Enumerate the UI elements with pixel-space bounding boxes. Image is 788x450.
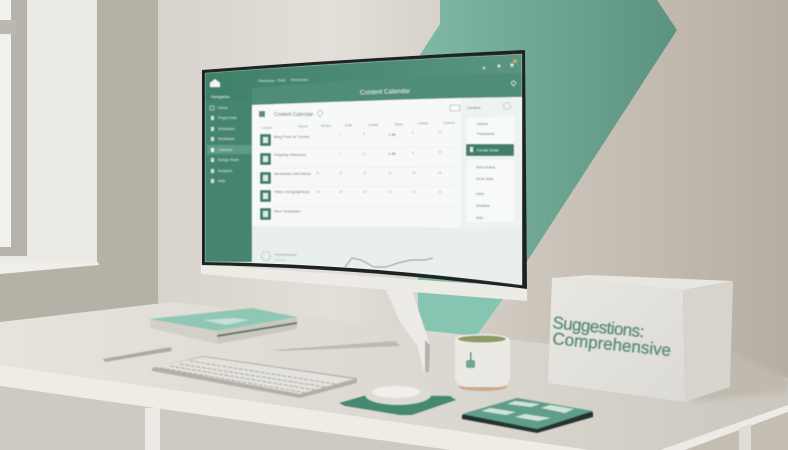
calendar numbers: 16 — [438, 171, 442, 175]
calendar numbers: 9 — [412, 131, 414, 135]
content rows: New Templates — [274, 208, 301, 214]
calendar numbers: 19 — [339, 190, 343, 194]
calendar numbers: 11 — [316, 171, 320, 175]
column labels: Content — [261, 126, 272, 130]
sidebar navigation — [207, 94, 252, 183]
screen contents — [205, 54, 522, 285]
sidebar navigation: Home — [218, 106, 228, 110]
line chart — [345, 258, 433, 267]
row 2 — [260, 153, 271, 165]
mug rim and tea — [455, 334, 509, 344]
calendar numbers: 18 — [316, 190, 320, 194]
box top — [552, 275, 733, 290]
box label: Suggestions: — [552, 313, 645, 341]
calendar numbers: 8 — [363, 132, 365, 136]
column labels: Status — [394, 122, 403, 126]
header bar — [205, 54, 522, 105]
monitor bezel — [202, 50, 527, 289]
column labels: Review — [321, 124, 332, 128]
monitor stand — [273, 290, 430, 372]
bottom insight strip: Content — [275, 258, 286, 262]
pen — [103, 347, 172, 362]
box label: Comprehensive — [552, 329, 672, 360]
sidebar — [205, 100, 252, 262]
main calendar panel — [252, 97, 522, 285]
column labels: Channel — [443, 121, 455, 125]
box front — [548, 278, 685, 402]
logo icon — [210, 79, 220, 87]
calendar numbers: 1:46 — [388, 151, 397, 156]
right side panel: Participants — [477, 132, 495, 136]
top right controls — [450, 102, 510, 111]
box label — [552, 313, 672, 360]
sidebar navigation: Design Team — [218, 158, 239, 162]
mug handle — [509, 346, 525, 376]
desk leg right — [739, 424, 751, 450]
window recess — [0, 0, 99, 274]
mug saucer — [459, 383, 507, 391]
column labels: Update — [368, 123, 379, 127]
monitor — [201, 50, 527, 301]
calendar numbers: 7 — [339, 152, 341, 156]
column labels: Draft — [345, 124, 352, 128]
header icons — [482, 59, 517, 86]
calendar numbers: 7 — [339, 132, 341, 136]
calendar numbers: 12 — [339, 171, 343, 175]
panel heading — [259, 111, 265, 117]
box side — [683, 281, 733, 402]
desk — [0, 302, 788, 450]
notebook — [150, 308, 297, 344]
lower teal part of wall shape — [418, 290, 508, 335]
mouse pad — [339, 395, 456, 415]
sidebar navigation: Help — [218, 179, 225, 183]
sidebar navigation: Calendar — [218, 148, 233, 152]
main calendar panel: Content Calendar — [274, 112, 314, 118]
mug — [455, 334, 525, 391]
column labels: Publish — [418, 122, 429, 126]
create button — [466, 144, 514, 156]
calendar numbers: 10 — [438, 130, 442, 134]
right side panel: Format: Detail — [477, 148, 499, 152]
row 1 — [260, 134, 271, 146]
calendar numbers — [316, 130, 442, 194]
coaster — [462, 398, 593, 433]
row 4 — [260, 190, 271, 202]
row 3 — [260, 172, 271, 184]
header band — [252, 73, 522, 105]
calendar numbers: 10 — [438, 150, 442, 154]
content rows — [260, 134, 311, 220]
green wall shape — [418, 0, 677, 335]
right side panel: Inline — [476, 192, 484, 196]
calendar numbers: 20 — [363, 190, 367, 194]
row 5 — [260, 208, 271, 220]
sidebar navigation: Workflows — [218, 137, 235, 141]
right side panel: Kinch Button — [476, 166, 495, 170]
box — [548, 275, 788, 402]
bottom insight strip: Performance — [275, 253, 297, 257]
mug body — [455, 339, 510, 387]
calendar numbers: 14 — [388, 171, 392, 175]
coaster icons — [507, 401, 540, 407]
sidebar navigation: Project Hub — [218, 116, 237, 120]
notebook card — [203, 318, 249, 325]
content rows: Newsletter Mid-Week — [274, 171, 311, 176]
calendar numbers: 9 — [412, 151, 414, 155]
calendar numbers: 1:45 — [388, 132, 397, 137]
right side panel: Arrow Style — [476, 177, 493, 181]
keyboard — [152, 356, 357, 398]
content rows: Video: Infographic(s) — [274, 189, 311, 194]
content rows: Blog Post: AI Trends — [274, 134, 309, 139]
top navigation: Tools — [277, 78, 286, 82]
sidebar navigation: Analytics — [218, 169, 233, 173]
right side panel: Workflow — [476, 204, 490, 208]
calendar numbers: 8 — [363, 152, 365, 156]
sidebar navigation: Navigation — [211, 94, 230, 99]
keyboard keys — [161, 361, 335, 393]
row dividers — [273, 147, 460, 206]
right side panel: Actions — [477, 122, 488, 126]
desk leg left — [145, 408, 160, 450]
mouse — [365, 385, 431, 405]
header title: Content Calendar — [360, 88, 411, 96]
calendar numbers: 22 — [412, 190, 416, 194]
top right controls: Content — [467, 106, 481, 110]
sidebar navigation: Schedules — [218, 127, 235, 131]
calendar numbers: 13 — [363, 171, 367, 175]
calendar numbers: 21 — [388, 190, 392, 194]
calendar numbers: 23 — [438, 190, 442, 194]
calendar numbers: 15 — [412, 171, 416, 175]
monitor chin and frame — [201, 264, 527, 301]
column labels — [261, 121, 455, 130]
top navigation: Resources — [291, 78, 308, 82]
mug logo — [466, 360, 475, 368]
column labels: Report — [298, 124, 308, 128]
bottom insight strip — [262, 252, 433, 267]
top navigation — [258, 78, 308, 83]
right side panel — [466, 116, 514, 222]
box shadow — [690, 352, 788, 402]
top navigation: Overview — [258, 78, 275, 83]
right side panel: Help — [476, 216, 483, 220]
content rows: Flagship Webinars — [274, 152, 306, 157]
screen — [205, 54, 522, 285]
